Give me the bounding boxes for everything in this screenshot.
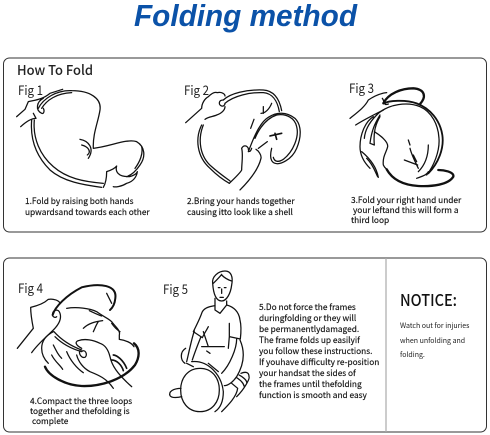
step 5 text block: The frame folds up easilyif <box>259 334 360 346</box>
caption: step 2: causing itto look like a shell <box>187 206 293 218</box>
fig 1 label: Fig 1 <box>18 80 43 99</box>
caption: step 3: third loop <box>351 214 389 226</box>
notice heading: NOTICE: <box>400 287 457 311</box>
illustration: fig 5 <box>170 271 249 412</box>
notice text: Watch out for injuries <box>400 321 470 331</box>
step 5 text block: your handsat the sides of <box>259 367 356 379</box>
step 5 text block: you follow these instructions. <box>259 345 372 357</box>
illustration: fig 4 <box>17 285 139 388</box>
caption: step 3: your leftand this will form a <box>353 204 459 216</box>
fig 4 label: Fig 4 <box>18 278 43 297</box>
caption: step 1: 1.Fold by raising both hands <box>25 195 134 207</box>
step 5 text block: be permanentlydamaged. <box>259 323 359 335</box>
step 5 text block: function is smooth and easy <box>259 389 368 401</box>
step 5 text block: the frames until thefolding <box>259 378 362 390</box>
divider <box>385 258 387 432</box>
illustration: fig 2 <box>186 90 300 190</box>
fig 2 label: Fig 2 <box>184 80 209 99</box>
step 5 text block: 5.Do not force the frames <box>259 301 356 313</box>
illustration: fig 1 <box>17 89 144 187</box>
panel: how to fold <box>4 58 486 232</box>
step 5 text block: duringfolding or they will <box>259 312 356 324</box>
caption: step 4: together and thefolding is <box>30 405 130 417</box>
panel: fig 4, fig 5 and notice <box>4 258 486 432</box>
caption: step 4: complete <box>32 415 69 427</box>
fig 3 label: Fig 3 <box>349 78 374 97</box>
caption: step 1: upwardsand towards each other <box>25 206 150 218</box>
notice text: when unfolding and <box>400 336 465 346</box>
notice text: folding. <box>400 350 425 360</box>
fig 5 label: Fig 5 <box>163 279 188 298</box>
heading: how to fold: How To Fold <box>17 59 93 79</box>
caption: step 3: 3.Fold your right hand under <box>351 194 462 206</box>
step 5 text block: If youhave difficulty re-position <box>259 356 379 368</box>
caption: step 4: 4.Compact the three loops <box>30 395 132 407</box>
caption: step 2: 2.Bring your hands together <box>187 195 295 207</box>
illustration: fig 3 <box>350 88 453 186</box>
